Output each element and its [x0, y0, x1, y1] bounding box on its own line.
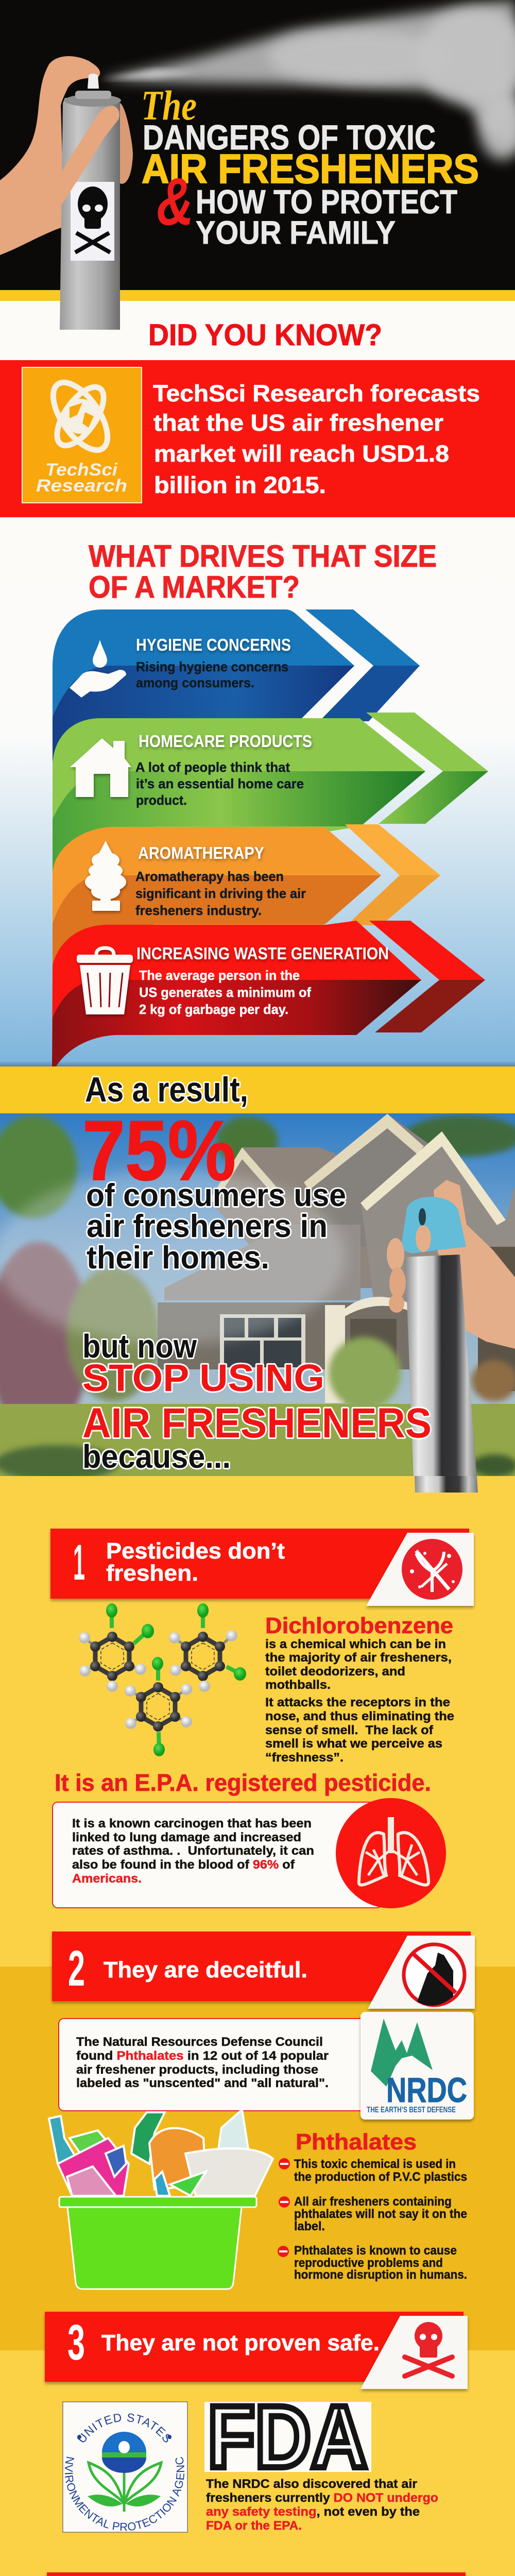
- TechSci logo: TechSci: [45, 460, 118, 480]
- text: dichlorobenzene description: mothballs.: [265, 1678, 331, 1692]
- text: NRDC safety testing: The NRDC also discovered that air: [206, 2477, 417, 2491]
- arrow: aromatherapy: fresheners industry.: [135, 903, 262, 918]
- icon: red skull and bones: [405, 2322, 452, 2376]
- image: bucket of plastics: [49, 2110, 273, 2289]
- banner 1: 1: [73, 1534, 85, 1590]
- text: dichlorobenzene description: toilet deodorizers, and: [265, 1665, 405, 1679]
- card: NRDC finding: The Natural Resources Defense Council: [76, 2035, 323, 2049]
- text: of consumers use air fresheners: air fresheners in: [87, 1209, 328, 1244]
- panel: TechSci forecast: [0, 360, 515, 517]
- stat: 75 percent: 75%: [82, 1103, 236, 1198]
- TechSci logo: Research: [36, 476, 127, 496]
- list: phthalates facts: hormone disruption in humans.: [294, 2268, 467, 2282]
- icon: skull and crossbones: [75, 187, 110, 252]
- arrow: hygiene concerns: [53, 609, 420, 768]
- sky: [0, 1113, 515, 1476]
- forecast text: TechSci Research forecasts: [153, 380, 480, 406]
- arrow: increasing waste generation: 2 kg of garbage per day.: [139, 1002, 288, 1017]
- logo: NRDC: NRDC: [386, 2071, 467, 2110]
- heading: EPA registered pesticide: It is an E.P.A. registered pesticide.: [55, 1769, 431, 1796]
- can bottom overlapping yellow: [415, 1476, 478, 1493]
- panel: as a result band: [0, 1066, 515, 1113]
- heading: what drives that size: WHAT DRIVES THAT SIZE: [89, 539, 437, 573]
- card: NRDC finding: air freshener products, including those: [76, 2063, 318, 2077]
- banner 3: They are not proven safe.: [101, 2330, 380, 2355]
- text: of consumers use air fresheners: [86, 1178, 346, 1276]
- card: NRDC finding: labeled as "unscented" and "all natural".: [76, 2076, 329, 2090]
- forecast text: [153, 380, 480, 498]
- banner 4: [47, 2572, 470, 2576]
- arrow: homecare products: HOMECARE PRODUCTS: [139, 732, 312, 751]
- hand gripping can, back part: [0, 56, 133, 255]
- forecast text: that the US air freshener: [153, 410, 443, 436]
- hand and aerosol can: [387, 1180, 515, 1494]
- text: but now stop using air fresheners because: AIR FRESHENERS: [82, 1400, 432, 1447]
- text: dichlorobenzene description: the majority of air fresheners,: [265, 1651, 452, 1665]
- text: but now stop using air fresheners because: but now: [82, 1328, 197, 1365]
- list: phthalates facts: Phthalates is known to cause: [294, 2244, 457, 2258]
- title: your family: YOUR FAMILY: [196, 215, 396, 251]
- panel: hero: [0, 0, 515, 352]
- card: carcinogen: [53, 1798, 446, 1908]
- market drivers background gradient: [0, 517, 515, 1066]
- card: carcinogen: Americans.: [72, 1872, 142, 1886]
- lawn: [0, 1404, 515, 1476]
- list: phthalates facts: the production of P.V.C plastics: [294, 2170, 467, 2184]
- text: of consumers use air fresheners: of consumers use: [86, 1178, 346, 1213]
- banner 1: [50, 1529, 474, 1606]
- text: dichlorobenzene description: nose, and thus eliminating the: [265, 1709, 454, 1723]
- banner 2: 2: [68, 1940, 85, 1996]
- arrow: hygiene concerns: HYGIENE CONCERNS: [136, 635, 291, 654]
- list: phthalates facts: [278, 2157, 467, 2282]
- text: NRDC safety testing: any safety testing , not even by the: [206, 2505, 420, 2519]
- list: phthalates facts: This toxic chemical is used in: [294, 2157, 456, 2171]
- house: [158, 1114, 515, 1403]
- yellow band: [0, 290, 515, 301]
- title: dangers of toxic: DANGERS OF TOXIC: [143, 118, 436, 157]
- arrow: homecare products: it’s an essential home care: [136, 776, 304, 791]
- list: phthalates facts: All air fresheners containing: [294, 2195, 452, 2209]
- banner 1: freshen.: [106, 1561, 198, 1586]
- text: but now stop using air fresheners because: [82, 1328, 432, 1475]
- text: dichlorobenzene description: [265, 1637, 454, 1765]
- arrow: hygiene concerns: Rising hygiene concerns: [136, 659, 288, 674]
- icon: house: [70, 738, 131, 797]
- icon: water drop on hand: [70, 640, 126, 698]
- text: NRDC safety testing: [206, 2477, 438, 2533]
- text: dichlorobenzene description: smell is what we perceive as: [265, 1737, 442, 1751]
- arrow: homecare products: [53, 713, 488, 876]
- panel: yellow background sections: [0, 1476, 515, 2576]
- text: dichlorobenzene description: is a chemical which can be in: [265, 1637, 446, 1651]
- icon: lungs: [336, 1798, 446, 1908]
- logo: NRDC: THE EARTH’S BEST DEFENSE: [367, 2106, 456, 2114]
- text: dichlorobenzene description: “freshness”.: [265, 1751, 344, 1765]
- banner 1: Pesticides don’t: [106, 1538, 285, 1564]
- arrow: increasing waste generation: INCREASING WASTE GENERATION: [136, 944, 389, 963]
- title: how to protect: HOW TO PROTECT: [196, 183, 457, 221]
- card: carcinogen: rates of asthma. . Unfortunately, it can: [72, 1844, 314, 1858]
- heading: what drives that size: [89, 539, 437, 604]
- icon: tree air freshener: [85, 841, 126, 911]
- card: carcinogen: also be found in the blood of 96% of: [72, 1858, 295, 1872]
- arrow: increasing waste generation: US generates a minimum of: [139, 985, 311, 1000]
- spray can with skull label: [60, 74, 121, 330]
- background trees and shrubs: [0, 1115, 515, 1437]
- forecast text: billion in 2015.: [154, 472, 326, 498]
- arrow: homecare products: A lot of people think that: [135, 759, 290, 775]
- heading: dichlorobenzene: Dichlorobenzene: [265, 1613, 453, 1638]
- heading: did you know: DID YOU KNOW?: [148, 318, 382, 352]
- card: NRDC finding: [59, 2019, 368, 2111]
- heading: what drives that size: OF A MARKET?: [89, 570, 300, 604]
- panel: house photo: [0, 1070, 515, 1494]
- banner 2: They are deceitful.: [104, 1957, 307, 1982]
- spray haze over photo: [0, 1170, 345, 1345]
- title: The: The: [141, 82, 197, 129]
- title: ampersand: &: [157, 164, 194, 239]
- arrow: aromatherapy: AROMATHERAPY: [138, 843, 264, 862]
- title: [141, 82, 479, 251]
- foreground shrubs: [0, 1337, 515, 1481]
- banner 3: 3: [67, 2314, 85, 2370]
- bullet: [278, 2246, 289, 2257]
- logo: FDA: FDA: [208, 2387, 367, 2486]
- text: NRDC safety testing: fresheners currently DO NOT undergo: [206, 2491, 438, 2505]
- card: NRDC finding: found Phthalates in 12 out of 14 popular: [76, 2049, 329, 2063]
- panel: market drivers: [0, 517, 515, 1074]
- text: dichlorobenzene description: It attacks the receptors in the: [265, 1696, 450, 1709]
- bullet: [279, 2158, 290, 2170]
- arrow: aromatherapy: Aromatherapy has been: [135, 869, 284, 884]
- list: phthalates facts: label.: [294, 2219, 325, 2233]
- banner 2: [52, 1931, 475, 2009]
- logo: EPA seal: [63, 2402, 187, 2533]
- arrow: increasing waste generation: [52, 921, 485, 1074]
- arrow: hygiene concerns: among consumers.: [136, 675, 254, 690]
- logo: NRDC: [360, 2012, 474, 2120]
- logo: EPA seal: ENVIRONMENTAL PROTECTION AGENCY: [65, 2456, 184, 2531]
- panel: reason 4: [47, 2572, 470, 2576]
- bullet: [279, 2196, 290, 2208]
- heading: phthalates: Phthalates: [296, 2129, 417, 2155]
- list: phthalates facts: phthalates will not say it on the: [294, 2207, 467, 2221]
- title: air fresheners: AIR FRESHENERS: [142, 146, 479, 192]
- text: dichlorobenzene description: sense of smell. The lack of: [265, 1723, 434, 1737]
- banner 3: [45, 2312, 468, 2389]
- forecast text: market will reach USD1.8: [154, 440, 449, 467]
- hero black background: [0, 0, 515, 290]
- arrow: aromatherapy: significant in driving the air: [135, 886, 306, 901]
- icon: banned plant: [402, 1539, 462, 1600]
- card: carcinogen: linked to lung damage and increased: [72, 1831, 301, 1844]
- text: NRDC safety testing: FDA or the EPA.: [206, 2519, 302, 2533]
- text: but now stop using air fresheners because: because...: [82, 1438, 231, 1475]
- card: carcinogen: It is a known carcinogen that has been: [72, 1817, 312, 1831]
- text: as a result: As a result,: [85, 1070, 248, 1109]
- icon: no-spy sign: [404, 1944, 465, 2006]
- thumb across can: [61, 106, 119, 206]
- text: but now stop using air fresheners because: STOP USING: [82, 1357, 324, 1399]
- panel: reason 1: [50, 1529, 474, 1908]
- panel: reason 2: [49, 1931, 475, 2289]
- logo: EPA seal: UNITED STATES: [77, 2413, 171, 2443]
- arrow: aromatherapy: [53, 824, 440, 969]
- arrow: homecare products: product.: [136, 792, 187, 808]
- list: phthalates facts: reproductive problems and: [294, 2256, 443, 2270]
- molecule diagrams: dichlorobenzene isomers: [79, 1603, 246, 1756]
- text: of consumers use air fresheners: their homes.: [87, 1240, 269, 1276]
- TechSci logo: [22, 367, 142, 503]
- arrow: increasing waste generation: The average person in the: [139, 968, 300, 983]
- aerosol spray cloud: [100, 0, 515, 160]
- red band: [0, 360, 515, 517]
- icon: trash bin: [77, 948, 133, 1014]
